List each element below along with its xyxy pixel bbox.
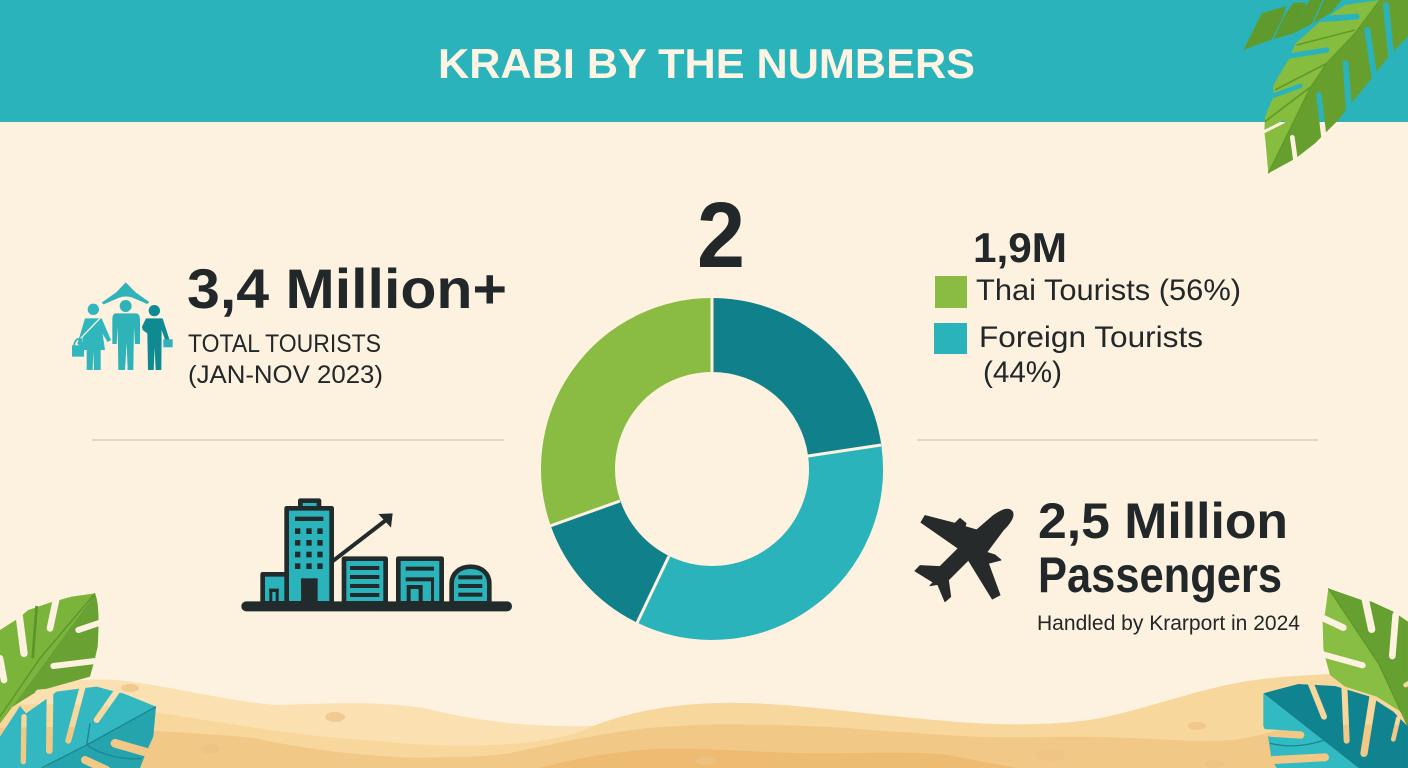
sand dunes [0, 674, 1408, 768]
donut chart [550, 298, 881, 623]
icon: ground line [241, 601, 512, 611]
icon: woman with bag [72, 304, 111, 370]
leaf: bottom left teal [0, 687, 156, 768]
legend: foreign swatch [934, 323, 967, 354]
stat: total tourists [187, 257, 507, 389]
icon: growth arrow [332, 518, 388, 562]
icon: airplane [915, 509, 1013, 602]
stat: passengers: Passengers [1038, 547, 1282, 603]
big number: 2 [697, 183, 745, 287]
legend: (44%) [983, 356, 1062, 389]
leaf: top right palm [1243, 0, 1408, 173]
legend: Foreign Tourists [979, 321, 1203, 354]
legend: Thai swatch [935, 276, 967, 308]
title: KRABI BY THE NUMBERS [438, 40, 975, 87]
segment: teal [653, 450, 846, 603]
legend [934, 224, 1241, 389]
divider right [917, 439, 1318, 441]
header band [0, 0, 1408, 122]
stat: total tourists: TOTAL TOURISTS [188, 330, 381, 358]
divider left [92, 439, 504, 441]
stat: passengers: Handled by Krarport in 2024 [1037, 612, 1300, 635]
stat: total tourists: (JAN-NOV 2023) [188, 361, 383, 389]
legend: 1,9M [973, 224, 1067, 271]
stat: passengers [1037, 493, 1300, 635]
segment: dark teal lower [585, 513, 653, 589]
legend: Thai Tourists (56%) [976, 274, 1241, 307]
icon: man centre [112, 300, 140, 370]
stat: total tourists: 3,4 Million+ [187, 257, 507, 320]
leaf: bottom right teal [1263, 684, 1408, 768]
icon: buildings with rising arrow [241, 501, 512, 611]
segment: green [578, 335, 712, 513]
stat: passengers: 2,5 Million [1038, 493, 1288, 549]
icon: roof [102, 282, 149, 304]
leaf: bottom right green [1323, 588, 1408, 727]
leaf: bottom left green [0, 593, 99, 723]
segment: dark teal top [712, 335, 845, 450]
icon: man right [142, 305, 173, 370]
icon: tourists group [72, 282, 173, 370]
